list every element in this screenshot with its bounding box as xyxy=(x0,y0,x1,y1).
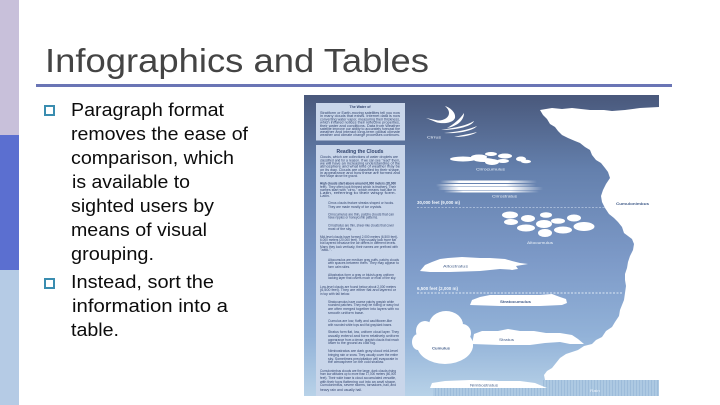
sky background xyxy=(304,95,659,396)
panel body text: have ripples or honeycomb patterns. xyxy=(328,216,378,220)
panel body text: names start with "cirro-" which means hair-like in xyxy=(320,188,396,192)
bullet text 2: information into a xyxy=(72,295,229,316)
panel body text: the atmosphere on the cold shallow. xyxy=(328,360,384,364)
label: stratus: Stratus xyxy=(499,337,514,342)
panel body text: Altostratus form a gray or bluish-gray uniform xyxy=(328,273,394,277)
panel body text: lower to the ground as cold fog. xyxy=(328,341,376,345)
bullet text 1: means of visual xyxy=(71,219,207,240)
sidebar colour bars xyxy=(0,0,19,405)
panel body text xyxy=(320,155,400,392)
title rule xyxy=(36,84,672,87)
cloud chart illustration xyxy=(304,95,659,396)
panel body text: Cumulonimbus, severe storms, tornadoes, hail, and xyxy=(320,383,396,387)
bullet text 2: table. xyxy=(71,319,119,340)
panel body text: usually extend and form relatively uniform xyxy=(328,334,399,338)
panel body text: Cirrocumulus are thin, patchy clouds that can xyxy=(328,212,394,216)
panel body text: Mid-level clouds have formed 2,000 meters (6,500 feet)- xyxy=(320,235,399,239)
bullet text 2 xyxy=(71,271,229,340)
panel body text: rounded patches. They may be rolling or wavy but xyxy=(328,303,399,307)
panel body text: Latin, referring to their wispy form. xyxy=(320,191,396,195)
panel heading: Reading the Clouds xyxy=(337,149,384,155)
panel body text: in appearance and how these are formed and xyxy=(320,171,400,175)
cloud: cumulonimbus xyxy=(540,107,659,380)
bullet text 1: sighted users by xyxy=(71,195,215,216)
panel: the water cycle intro: Stratiform or Earth-moving satellites tell you now xyxy=(320,111,400,115)
label: stratocumulus: Stratocumulus xyxy=(500,299,531,304)
panel body text: Clouds, which are collections of water droplets are xyxy=(320,155,398,159)
altitude line: 30,000 feet: 30,000 feet (9,000 m) xyxy=(417,200,460,205)
panel: the water cycle intro: weather and climate change processes continues. xyxy=(320,133,400,137)
label: altostratus: Altostratus xyxy=(443,264,468,268)
panel body text: Stratocumulus have coarse patchy grayish white xyxy=(328,300,394,304)
cloud: cirrostratus xyxy=(436,180,543,198)
panel body text: Cirrostratus are thin, sheer-like clouds that cover xyxy=(328,224,395,228)
bullet text 1 xyxy=(71,99,249,264)
rain xyxy=(433,380,659,396)
label: cumulus: Cumulus xyxy=(432,346,450,350)
panel body text: Cumulonimbus clouds are the large, dark clouds rising xyxy=(320,369,396,373)
panel body text: appearance from a dense, grayish clouds that reach xyxy=(328,338,399,342)
panel body text: are often merged together into layers with no xyxy=(328,307,399,311)
panel: reading the clouds xyxy=(316,145,405,396)
panel: the water cycle intro: converting water vapor, measuring their thickness, xyxy=(320,118,400,122)
bullet text 2: Instead, sort the xyxy=(71,271,214,292)
label: cumulonimbus: Cumulonimbus xyxy=(616,201,649,206)
bullet text 1: Paragraph format xyxy=(71,99,225,120)
panel body text: sky. Sometimes precipitation will evaporate in xyxy=(328,357,398,361)
bullet item: sort into table xyxy=(45,271,229,340)
panel body text: Latin. xyxy=(320,194,330,198)
panel body text: feet). Their wide base is cloud accumulated versatile, xyxy=(320,376,396,380)
bullet icon 2 xyxy=(45,279,54,288)
label: rain: Rain xyxy=(590,388,600,393)
panel: the water cycle intro: weather and interact long-term global climate xyxy=(320,130,400,134)
bullet icon 1 xyxy=(45,106,54,115)
panel body text: Altocumulus are medium gray puffs, patchy clouds xyxy=(328,258,399,262)
panel body text: with their tops flattening out into an anvil shape. xyxy=(320,380,396,384)
panel body text: bringing rain or snow. They usually cover the entire xyxy=(328,353,398,357)
label: cirrocumulus: Cirrocumulus xyxy=(476,166,505,172)
panel: the water cycle intro xyxy=(316,103,405,140)
panel: the water cycle intro: in many clouds that exists. Internet data is now xyxy=(320,114,401,118)
label: cirrus: Cirrus xyxy=(427,134,441,140)
panel body text: 6,000 meters (20,000 feet). They usually look more flat xyxy=(320,238,396,242)
cloud: cirrus xyxy=(426,106,477,140)
panel body text: Low-level clouds are found below about 2,000 meters xyxy=(320,285,396,289)
panel body text: looking layer that covers much or most of the sky. xyxy=(328,276,396,280)
panel body text: most of the sky. xyxy=(328,227,352,231)
panel body text: They are made mostly of ice crystals. xyxy=(328,205,382,209)
panel body text: (6,500 feet). They are either flat and layered or xyxy=(320,288,397,292)
panel body text: smooth uniform base. xyxy=(328,311,364,315)
panel body text: Cumulus are low, fluffy and cauliflower-like xyxy=(328,319,392,323)
panel: the water cycle intro: which infrared notices their reflective properties, xyxy=(320,120,400,124)
panel: the water cycle intro: their water and conditions. Data from Weather xyxy=(320,124,401,128)
panel body text: but layered because the air differs in different levels. xyxy=(320,241,396,245)
panel body text: High clouds start above around 6,000 meters (20,000 xyxy=(320,182,396,186)
panel body text: their shape above the ground. xyxy=(320,174,358,178)
cloud: nimbostratus xyxy=(430,380,547,388)
panel body text: we will have an increasing understanding of the xyxy=(320,162,400,166)
panel body text: heavy rain and usually hail. xyxy=(320,388,362,392)
panel: the water cycle intro: satellite improve our ability to accurately forecast the xyxy=(320,127,400,131)
label: nimbostratus: Nimbostratus xyxy=(470,382,498,388)
cloud: cirrocumulus xyxy=(450,152,531,172)
panel body text: from low altitudes up to more than 17,000 meters (60,000 xyxy=(320,372,396,376)
panel body text: on its way. Clouds are classified by their shape, xyxy=(320,168,400,172)
bullet text 1: grouping. xyxy=(71,243,154,264)
bullet text 1: comparison, which xyxy=(71,147,234,168)
label: altocumulus: Altocumulus xyxy=(527,240,553,245)
panel body text: feet). They often look thinned which is feathery. Their xyxy=(320,185,397,189)
panel body text: "alto-". xyxy=(320,248,332,252)
panel body text: Stratus form flat, low, uniform cloud layer. They xyxy=(328,330,399,334)
bullet text 1: removes the ease of xyxy=(71,123,249,144)
panel body text: classified and for a reason. If we can see "read" them, xyxy=(320,158,400,162)
cloud: stratocumulus xyxy=(470,294,567,306)
bullet item: paragraph format xyxy=(45,99,249,264)
bullet text 1: is available to xyxy=(72,171,190,192)
panel body text: form calm skies. xyxy=(328,265,350,269)
panel body text: with spaces between them. They may appear to xyxy=(328,261,399,265)
altitude line: 6,500 feet: 6,500 feet (2,000 m) xyxy=(417,286,458,291)
cloud: altocumulus xyxy=(502,212,594,245)
panel body text: with rounded white tops and flat gray/dark bases. xyxy=(328,323,392,327)
panel body text: atmosphere and what kind of weather may be xyxy=(320,164,400,168)
title: Infographics and Tables xyxy=(45,43,429,80)
panel body text: Many they look verticaly, their names are prefixed with xyxy=(320,245,398,249)
cloud: stratus xyxy=(472,329,584,345)
bullet list xyxy=(45,99,249,340)
label: cirrostratus: Cirrostratus xyxy=(492,194,517,198)
panel body text: Cirrus clouds feature streaks shaped or hooks. xyxy=(328,201,394,205)
panel: the water cycle intro: The Water of xyxy=(349,105,371,109)
cloud: cumulus xyxy=(412,311,473,364)
cloud: altostratus xyxy=(420,257,528,272)
panel body text: Nimbostratus are dark gray cloud mid-level xyxy=(328,349,398,353)
panel body text: in top with fall below. xyxy=(320,292,350,296)
